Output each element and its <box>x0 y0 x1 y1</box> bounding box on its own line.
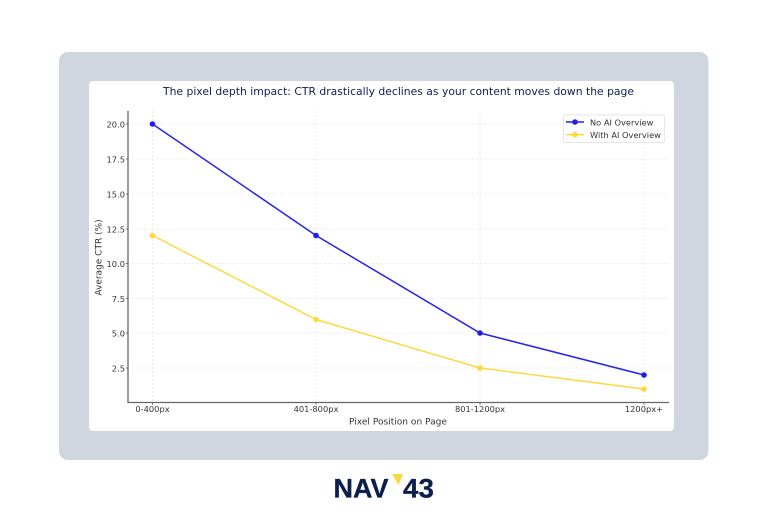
panel: white chart card <box>89 81 674 431</box>
icon: yellow triangle <box>392 474 403 485</box>
y-axis tick labels: 7.5 <box>112 294 125 304</box>
legend <box>564 115 664 142</box>
y-axis tick labels: 17.5 <box>107 154 125 164</box>
y-axis tick labels: 12.5 <box>107 224 125 234</box>
y-axis title: Average CTR (%) <box>94 219 104 296</box>
panel: outer grey frame <box>59 52 708 460</box>
y-axis tick labels: 5.0 <box>112 328 125 338</box>
logo: NAV43 <box>334 474 434 504</box>
line chart <box>94 111 669 427</box>
x-axis tick labels: 401-800px <box>294 404 339 414</box>
series: No AI Overview <box>150 121 647 378</box>
x-axis tick labels: 801-1200px <box>455 404 505 414</box>
legend: No AI Overview <box>590 117 654 127</box>
x-axis tick labels: 1200px+ <box>625 404 663 414</box>
logo: NAV43: NAV <box>334 474 388 504</box>
y-axis tick labels: 15.0 <box>107 190 125 200</box>
legend: With AI Overview <box>590 130 661 140</box>
series: With AI Overview <box>150 233 647 392</box>
axes <box>128 111 669 402</box>
y-axis tick labels <box>107 120 125 374</box>
x-axis title: Pixel Position on Page <box>349 417 447 427</box>
x-axis tick labels <box>135 404 663 414</box>
chart title: The pixel depth impact: CTR drastically declines as your content moves down the page <box>162 85 634 98</box>
y-axis tick labels: 20.0 <box>107 120 125 130</box>
x-axis tick labels: 0-400px <box>135 404 170 414</box>
y-axis tick labels: 2.5 <box>112 364 125 374</box>
logo: NAV43: 43 <box>403 474 434 504</box>
y-axis tick labels: 10.0 <box>107 259 125 269</box>
